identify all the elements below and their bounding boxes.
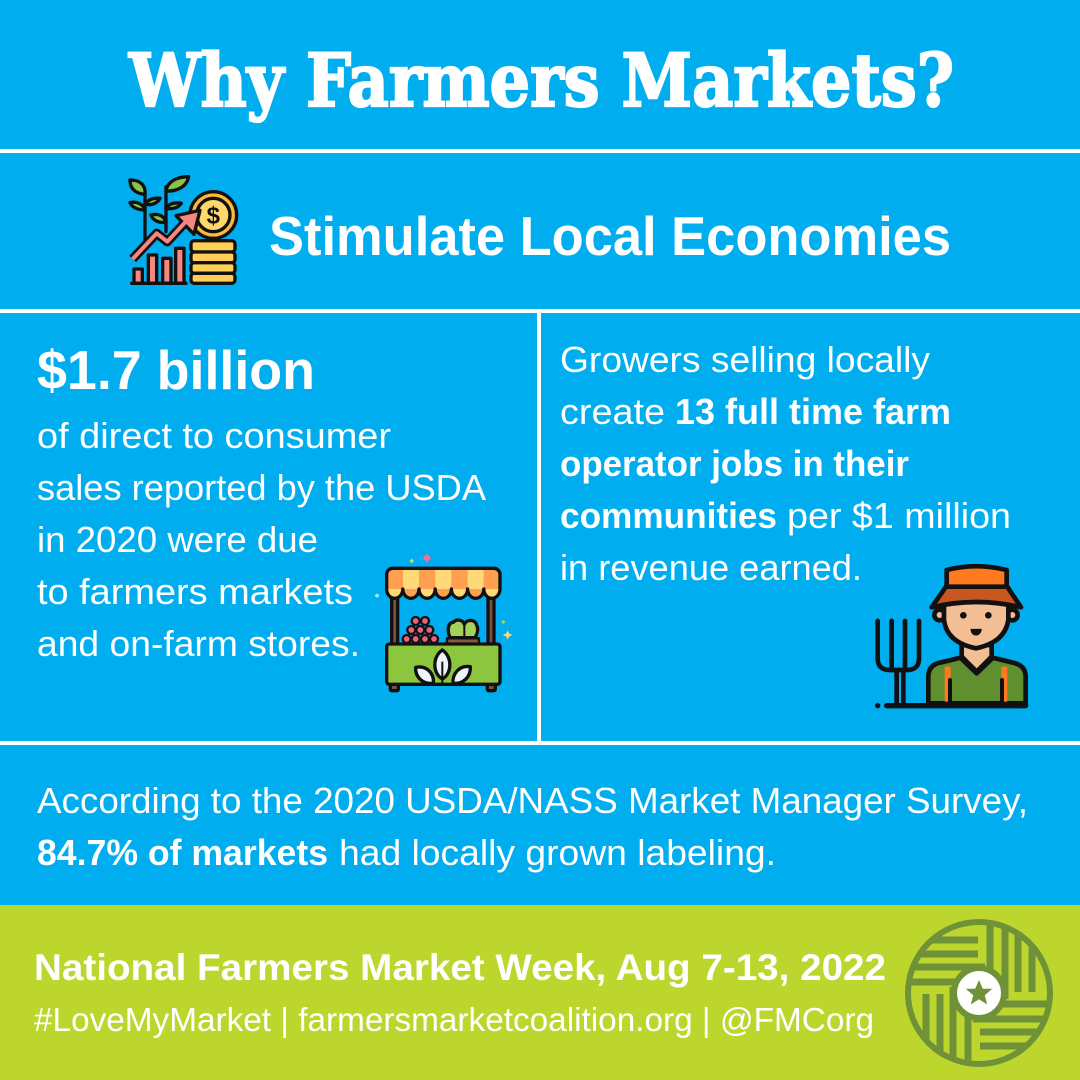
text block: market manager survey <box>37 780 1028 873</box>
text block: market manager survey: 84.7% of markets <box>37 832 328 873</box>
stat: $1.7 billion: $1.7 billion <box>37 339 315 401</box>
text block: farm operator jobs: create <box>560 391 665 432</box>
heading: Stimulate Local Economies: Stimulate Local Economies <box>269 205 951 267</box>
panel: footer banner <box>0 905 1080 1080</box>
panel: farm jobs statistic <box>560 339 1026 708</box>
text block: sales description: sales reported by the USDA <box>37 467 486 508</box>
panel: direct sales statistic <box>37 339 513 691</box>
text block: farm operator jobs: communities <box>560 495 777 536</box>
footer heading: event date: National Farmers Market Week, Aug 7-13, 2022 <box>34 947 886 988</box>
icon: economic growth chart with plants and coins <box>130 177 237 283</box>
text block: farm operator jobs: Growers selling locally <box>560 339 930 380</box>
text block: farm operator jobs: in revenue earned. <box>560 547 862 588</box>
text block: farm operator jobs <box>560 339 1011 588</box>
text block: sales description: of direct to consumer <box>37 415 391 456</box>
text block: sales description <box>37 415 486 664</box>
icon: market stall <box>374 554 513 691</box>
text block: sales description: in 2020 were due <box>37 519 318 560</box>
footer links: #LoveMyMarket | farmersmarketcoalition.org | @FMCorg <box>34 1001 874 1038</box>
text block: farm operator jobs: operator jobs in their <box>560 443 909 484</box>
text block: sales description: and on-farm stores. <box>37 623 360 664</box>
logo: Farmers Market Coalition <box>905 919 1053 1067</box>
icon: economic growth chart with plants and coins: $ <box>207 203 220 230</box>
text block: farm operator jobs: 13 full time farm <box>675 391 951 432</box>
title: Why Farmers Markets? <box>128 38 954 124</box>
text block: market manager survey: had locally grown labeling. <box>339 832 776 873</box>
text block: sales description: to farmers markets <box>37 571 353 612</box>
icon: farmer with pitchfork <box>875 566 1026 708</box>
text block: market manager survey: According to the 2020 USDA/NASS Market Manager Survey, <box>37 780 1028 821</box>
text block: farm operator jobs: per $1 million <box>787 495 1011 536</box>
